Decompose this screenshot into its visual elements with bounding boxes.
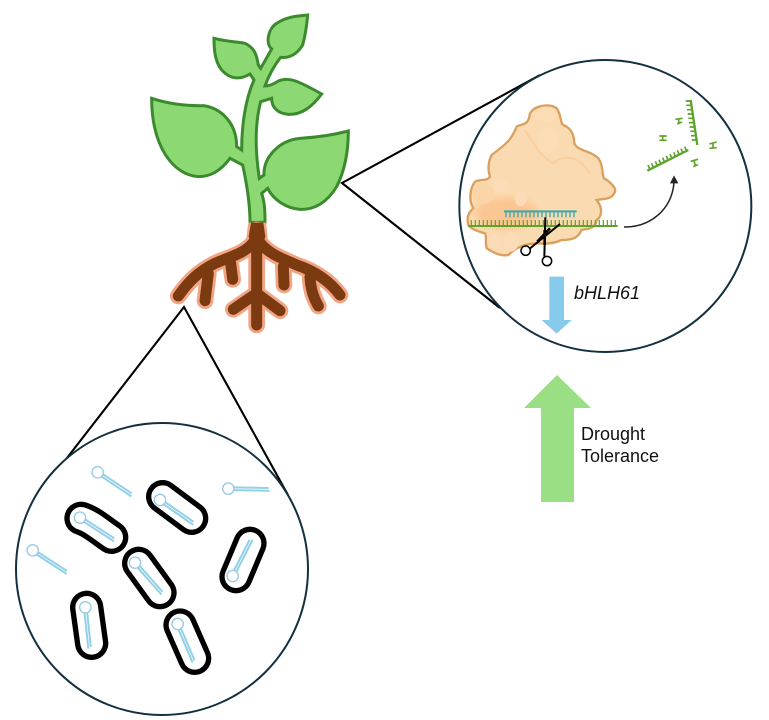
zoom lines: right callout	[342, 75, 540, 308]
label: bHLH61: bHLH61	[574, 283, 640, 303]
guide RNA and target strand	[468, 211, 618, 226]
panel: soil bacteria circle	[16, 423, 308, 715]
hairpin RNAs in bacteria	[72, 492, 256, 664]
bacteria	[81, 497, 250, 658]
protein blob	[468, 106, 615, 255]
arrow: bHLH61 down-regulated	[542, 277, 572, 334]
roots	[178, 223, 340, 325]
label: drought tolerance: Tolerance	[581, 446, 659, 466]
plant	[152, 15, 348, 325]
stem and leaves	[152, 15, 348, 222]
zoom lines: bottom callout	[60, 307, 288, 495]
curved arrow	[624, 175, 678, 227]
label: drought tolerance: Drought	[581, 424, 645, 444]
panel: right zoom circle	[459, 60, 751, 352]
icon: scissors	[521, 217, 560, 266]
cleaved RNA fragments	[647, 100, 717, 171]
arrow: drought tolerance up	[524, 375, 591, 502]
free hairpin RNAs	[25, 464, 270, 578]
